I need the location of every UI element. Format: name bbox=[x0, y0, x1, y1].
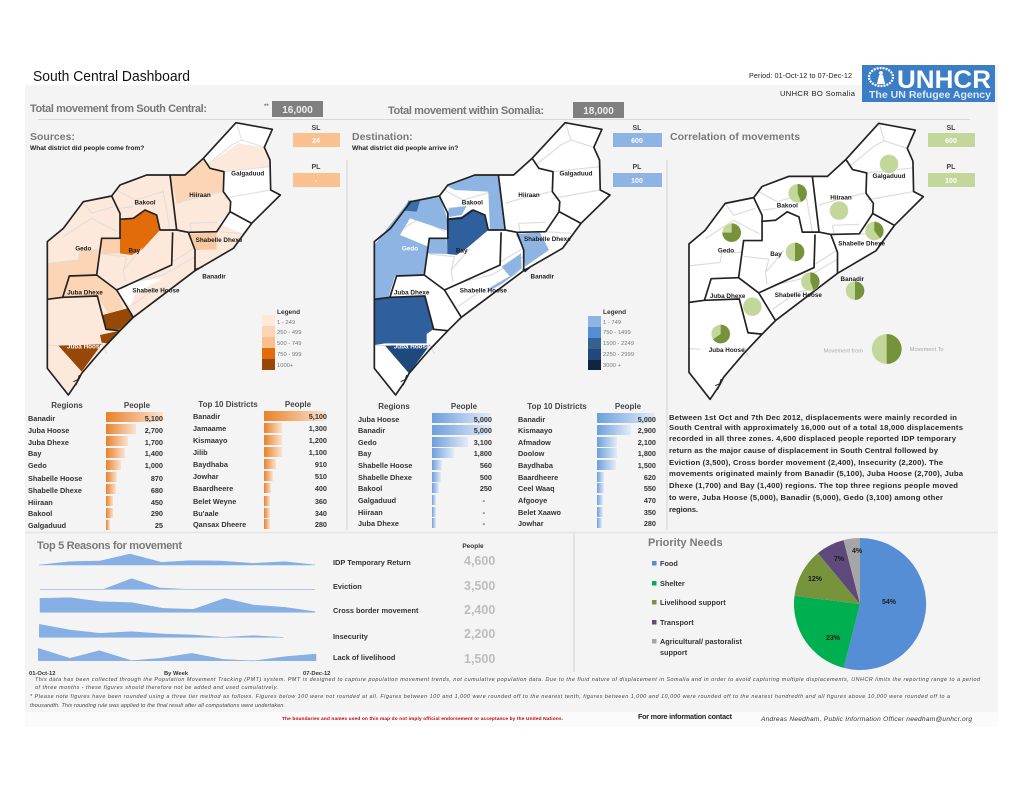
table: destination regions: - bbox=[483, 519, 486, 528]
table: source regions: 5,100 bbox=[145, 414, 163, 423]
narrative summary: regions. bbox=[669, 505, 698, 514]
table: destination regions bbox=[358, 402, 492, 528]
footnotes: thousandth. This rounding rule was applied to the final result after all computations were undertaken. bbox=[30, 703, 285, 709]
office name: UNHCR BO Somalia bbox=[780, 89, 856, 98]
map: sources choropleth: Juba Dhexe bbox=[67, 289, 103, 296]
table: source regions: 1,700 bbox=[145, 438, 163, 447]
table: source regions: Banadir bbox=[28, 414, 55, 423]
table: destination regions: 5,000 bbox=[474, 426, 492, 435]
narrative summary bbox=[669, 413, 964, 514]
table: source top 10 districts: 360 bbox=[315, 497, 327, 506]
stat boxes: destination SL and PL: 100 bbox=[631, 178, 643, 185]
total movement within Somalia: Total movement within Somalia: bbox=[388, 105, 544, 117]
table: destination top 10 districts: Top 10 Districts bbox=[527, 402, 587, 411]
icon: UNHCR logo: The UN Refugee Agency bbox=[869, 90, 991, 101]
legend: priority needs: Transport bbox=[660, 618, 694, 627]
map: correlation of movements with pies: Juba Dhexe bbox=[710, 293, 746, 300]
stat boxes: destination SL and PL: PL bbox=[633, 164, 642, 171]
table: source regions: Hiiraan bbox=[28, 498, 53, 507]
table: source regions: Juba Hoose bbox=[28, 426, 69, 435]
map: correlation of movements with pies: Juba Hoose bbox=[709, 347, 745, 354]
legend: priority needs: Agricultural/ pastoralist bbox=[660, 637, 742, 646]
pie chart: priority needs bbox=[794, 538, 926, 670]
legend: destination: Legend bbox=[603, 309, 626, 316]
table: destination regions: Juba Hoose bbox=[358, 415, 399, 424]
table: source regions: Galgaduud bbox=[28, 521, 66, 530]
footer strip bbox=[25, 712, 998, 727]
table: source regions: 1,000 bbox=[145, 461, 163, 470]
table: source regions: Regions bbox=[51, 401, 83, 410]
table: destination regions: Bay bbox=[358, 449, 372, 458]
map: destination choropleth: Galgaduud bbox=[559, 170, 593, 177]
map: sources choropleth: Shabelle Hoose bbox=[132, 288, 180, 295]
legend: sources: 750 - 999 bbox=[277, 352, 302, 358]
legend: sources bbox=[262, 309, 302, 370]
reasons list with values: Cross border movement bbox=[333, 606, 419, 615]
heading: top 5 reasons: Top 5 Reasons for movement bbox=[37, 540, 182, 552]
map: sources choropleth: Bakool bbox=[134, 200, 156, 207]
icon: UNHCR logo: UNHCR bbox=[897, 66, 991, 94]
chart axis labels bbox=[29, 671, 330, 677]
reasons list with values: 1,500 bbox=[464, 652, 495, 666]
reasons list with values: 2,200 bbox=[464, 627, 495, 641]
table: source regions: 680 bbox=[151, 486, 163, 495]
legend: destination: 1500 - 2249 bbox=[603, 341, 634, 347]
table: destination regions: - bbox=[483, 496, 486, 505]
map: correlation of movements with pies bbox=[689, 123, 944, 399]
heading: sources bbox=[30, 131, 144, 152]
table: destination top 10 districts: Baardheere bbox=[518, 473, 558, 482]
table: destination regions: Shabelle Hoose bbox=[358, 461, 412, 470]
stat boxes: correlation SL and PL: 100 bbox=[945, 178, 957, 185]
map: destination choropleth: Juba Hoose bbox=[394, 344, 430, 351]
table: source regions: Shabelle Hoose bbox=[28, 474, 82, 483]
pie chart: priority needs: 54% bbox=[882, 599, 897, 606]
map: sources choropleth bbox=[47, 123, 280, 395]
total movement from South Central: ** bbox=[264, 104, 269, 110]
legend: priority needs: Shelter bbox=[660, 579, 685, 588]
narrative summary: Eviction (3,500), Cross border movement (2,400), Insecurity (2,200). The bbox=[669, 458, 944, 467]
map: destination choropleth: Bay bbox=[456, 248, 468, 255]
table: source top 10 districts: Banadir bbox=[193, 412, 220, 421]
table: destination top 10 districts: Ceel Waaq bbox=[518, 484, 555, 493]
stat boxes: correlation SL and PL: SL bbox=[947, 125, 956, 132]
map: destination choropleth: Bakool bbox=[462, 200, 483, 207]
table: destination top 10 districts: Doolow bbox=[518, 449, 545, 458]
map: sources choropleth: Hiiraan bbox=[189, 192, 211, 199]
table: destination top 10 districts: 1,500 bbox=[638, 461, 656, 470]
map: correlation of movements with pies: Gedo bbox=[718, 248, 734, 255]
chart axis labels: 07-Dec-12 bbox=[303, 671, 330, 677]
legend: destination: 2250 - 2999 bbox=[603, 352, 634, 358]
stat boxes: destination SL and PL: SL bbox=[633, 125, 642, 132]
narrative summary: recorded in all three zones. 4,600 displaced people reported IDP temporary bbox=[669, 434, 957, 443]
table: destination top 10 districts: Belet Xaawo bbox=[518, 508, 562, 517]
table: source regions: 2,700 bbox=[145, 426, 163, 435]
map: correlation of movements with pies: Movement To bbox=[910, 347, 944, 353]
stat boxes: sources SL and PL: 24 bbox=[312, 138, 320, 145]
map: sources choropleth: Juba Hoose bbox=[67, 344, 103, 351]
table: source regions bbox=[28, 401, 163, 530]
table: destination regions: Banadir bbox=[358, 426, 385, 435]
stat boxes: sources SL and PL: - bbox=[315, 178, 318, 185]
legend: destination: 1 - 749 bbox=[603, 320, 621, 326]
table: source top 10 districts: Jamaame bbox=[193, 424, 226, 433]
table: destination top 10 districts: 470 bbox=[644, 496, 656, 505]
table: destination top 10 districts: 350 bbox=[644, 508, 656, 517]
table: destination regions: 500 bbox=[480, 473, 492, 482]
map: destination choropleth: Shabelle Hoose bbox=[460, 288, 507, 295]
pie chart: priority needs: 12% bbox=[808, 576, 823, 583]
map: correlation of movements with pies: Bay bbox=[770, 251, 782, 258]
icon: UNHCR logo bbox=[862, 65, 995, 102]
map: correlation of movements with pies: Shabelle Hoose bbox=[775, 292, 822, 299]
map: destination choropleth: Hiiraan bbox=[518, 192, 540, 199]
table: source regions: Bakool bbox=[28, 509, 52, 518]
table: destination regions: Bakool bbox=[358, 484, 382, 493]
table: destination top 10 districts: Baydhaba bbox=[518, 461, 554, 470]
map: destination choropleth: Shabelle Dhexe bbox=[524, 236, 571, 243]
stat boxes: sources SL and PL: SL bbox=[312, 125, 321, 132]
table: source regions: People bbox=[124, 401, 151, 410]
total movement from South Central bbox=[30, 101, 323, 117]
chart axis labels: By Week bbox=[164, 671, 189, 677]
table: destination top 10 districts: 550 bbox=[644, 484, 656, 493]
table: destination regions: Regions bbox=[378, 402, 410, 411]
table: destination top 10 districts bbox=[518, 402, 656, 528]
footnotes: * Please note figures have been rounded using a three tier method as follows. Figures below 100 were not rounded at all. Figures between 100 and 1,000 were rounded off to the nearest tenth, figures between 1,000 and 10,000 were rounded off to the nearest hundredth and all figures above 10,000 were rounded off to a bbox=[30, 694, 950, 700]
title bar bbox=[25, 65, 862, 85]
legend: priority needs bbox=[652, 559, 742, 657]
table: destination top 10 districts: Afmadow bbox=[518, 438, 551, 447]
legend: sources: 250 - 499 bbox=[277, 330, 302, 336]
narrative summary: return as the major cause of displacement in South Central followed by bbox=[669, 446, 939, 455]
map: correlation of movements with pies: Banadir bbox=[841, 276, 865, 283]
table: destination regions: Juba Dhexe bbox=[358, 519, 399, 528]
heading: sources: Sources: bbox=[30, 131, 75, 143]
legend: sources: 500 - 749 bbox=[277, 341, 302, 347]
table: source top 10 districts: 340 bbox=[315, 509, 327, 518]
map: correlation of movements with pies: Bakool bbox=[777, 202, 798, 209]
map: correlation of movements with pies: Movement from bbox=[824, 348, 863, 354]
reasons list with values bbox=[333, 543, 495, 666]
table: source top 10 districts: Jowhar bbox=[193, 472, 219, 481]
table: source regions: Gedo bbox=[28, 461, 47, 470]
heading: priority needs: Priority Needs bbox=[648, 537, 723, 549]
total movement within Somalia bbox=[388, 102, 624, 118]
table: source top 10 districts: Kismaayo bbox=[193, 436, 228, 445]
legend: sources: 1000+ bbox=[277, 363, 294, 369]
chart axis labels: 01-Oct-12 bbox=[29, 671, 55, 677]
reasons list with values: IDP Temporary Return bbox=[333, 558, 411, 567]
reasons list with values: People bbox=[462, 543, 484, 550]
legend: destination: 3000 + bbox=[603, 363, 622, 369]
stat boxes: sources SL and PL: PL bbox=[312, 164, 321, 171]
narrative summary: Between 1st Oct and 7th Dec 2012, displacements were mainly recorded in bbox=[669, 413, 957, 422]
heading: sources: What district did people come from? bbox=[30, 145, 144, 152]
table: source top 10 districts: Top 10 Districts bbox=[198, 400, 258, 409]
heading: destination: What district did people arrive in? bbox=[352, 145, 458, 152]
table: destination regions: 5,000 bbox=[474, 415, 492, 424]
table: source top 10 districts: Bu'aale bbox=[193, 509, 219, 518]
table: destination regions: 3,100 bbox=[474, 438, 492, 447]
table: source top 10 districts: Belet Weyne bbox=[193, 497, 236, 506]
legend: destination bbox=[588, 309, 634, 370]
map: destination choropleth: Gedo bbox=[402, 245, 418, 252]
legend: priority needs: Livelihood support bbox=[660, 598, 726, 607]
chart: weekly area sparklines bbox=[38, 554, 316, 661]
table: destination regions: 1,800 bbox=[474, 449, 492, 458]
reasons list with values: Insecurity bbox=[333, 632, 369, 641]
table: source regions: Shabelle Dhexe bbox=[28, 486, 82, 495]
legend: sources: 1 - 249 bbox=[277, 320, 295, 326]
pie chart: priority needs: 23% bbox=[826, 635, 841, 642]
table: source regions: 450 bbox=[151, 498, 163, 507]
table: destination top 10 districts: 280 bbox=[644, 519, 656, 528]
contact label: For more information contact bbox=[638, 712, 733, 721]
table: destination regions: Hiiraan bbox=[358, 508, 383, 517]
table: destination top 10 districts: 1,800 bbox=[638, 449, 656, 458]
map: destination choropleth: Banadir bbox=[531, 274, 555, 281]
total movement from South Central: 16,000 bbox=[282, 105, 313, 116]
table: destination top 10 districts: 5,000 bbox=[638, 415, 656, 424]
table: destination regions: Gedo bbox=[358, 438, 377, 447]
table: source regions: 25 bbox=[155, 521, 163, 530]
total movement within Somalia: 18,000 bbox=[583, 106, 614, 117]
legend: priority needs: support bbox=[660, 648, 688, 657]
reasons list with values: Eviction bbox=[333, 582, 362, 591]
table: destination regions: People bbox=[451, 402, 478, 411]
map: correlation of movements with pies: Hiiraan bbox=[830, 195, 852, 202]
table: source top 10 districts: 1,200 bbox=[309, 436, 327, 445]
table: source top 10 districts: 400 bbox=[315, 484, 327, 493]
reasons list with values: 4,600 bbox=[464, 554, 495, 568]
footnotes bbox=[30, 677, 981, 709]
table: source regions: 290 bbox=[151, 509, 163, 518]
stat boxes: destination SL and PL: 600 bbox=[631, 138, 643, 145]
dashboard background panel bbox=[25, 65, 998, 727]
heading: destination: Destination: bbox=[352, 131, 413, 143]
table: source top 10 districts: Baydhaba bbox=[193, 460, 229, 469]
narrative summary: South Central with approximately 16,000 out of a total 18,000 displacements bbox=[669, 423, 963, 432]
map: sources choropleth: Galgaduud bbox=[231, 170, 264, 177]
table: destination regions: Shabelle Dhexe bbox=[358, 473, 412, 482]
narrative summary: Dhexe (1,700) and Bay (1,400) regions. The top three regions people moved bbox=[669, 481, 958, 490]
legend: priority needs: Food bbox=[660, 559, 678, 568]
table: source top 10 districts: 5,100 bbox=[309, 412, 327, 421]
table: destination regions: 250 bbox=[480, 484, 492, 493]
table: destination regions: 560 bbox=[480, 461, 492, 470]
footnotes: of three months - these figures should therefore not be added and used cumulatively. bbox=[35, 685, 278, 691]
heading: destination bbox=[352, 131, 458, 152]
pie chart: priority needs: 4% bbox=[852, 548, 863, 555]
stat boxes: correlation SL and PL bbox=[928, 125, 975, 187]
footnotes: This data has been collected through the Population Movement Tracking (PMT) system. PMT is designed to capture population movement trends, not cumulative population data. Due to the fluid nature of displacement in Somalia and in order to avoid capturing multiple displacements, UNHCR limits the reporting range to a period bbox=[35, 677, 981, 683]
map: correlation of movements with pies: Shabelle Dhexe bbox=[838, 240, 886, 247]
dashboard title: South Central Dashboard bbox=[33, 68, 190, 85]
map: sources choropleth: Shabelle Dhexe bbox=[196, 237, 243, 244]
table: destination top 10 districts: 2,100 bbox=[638, 438, 656, 447]
table: destination top 10 districts: Jowhar bbox=[518, 519, 544, 528]
reasons list with values: 2,400 bbox=[464, 603, 495, 617]
table: destination top 10 districts: 620 bbox=[644, 473, 656, 482]
disclaimer: The boundaries and names used on this map do not imply official endorsement or acceptance by the United Nations. bbox=[282, 716, 563, 722]
table: source top 10 districts bbox=[193, 400, 327, 529]
table: destination top 10 districts: 2,900 bbox=[638, 426, 656, 435]
reasons list with values: 3,500 bbox=[464, 579, 495, 593]
table: source regions: Bay bbox=[28, 449, 42, 458]
stat boxes: correlation SL and PL: PL bbox=[947, 164, 956, 171]
table: destination regions: - bbox=[483, 508, 486, 517]
table: source top 10 districts: 1,300 bbox=[309, 424, 327, 433]
map: sources choropleth: Banadir bbox=[202, 274, 226, 281]
table: destination top 10 districts: Afgooye bbox=[518, 496, 547, 505]
table: source top 10 districts: 280 bbox=[315, 520, 327, 529]
table: destination top 10 districts: Kismaayo bbox=[518, 426, 553, 435]
table: source regions: 870 bbox=[151, 474, 163, 483]
heading: correlation of movements: Correlation of movements bbox=[670, 131, 800, 143]
table: destination regions: Galgaduud bbox=[358, 496, 396, 505]
legend: destination: 750 - 1499 bbox=[603, 330, 631, 336]
narrative summary: movements originated mainly from Banadir (5,100), Juba Hoose (2,700), Juba bbox=[669, 469, 964, 478]
table: source top 10 districts: 910 bbox=[315, 460, 327, 469]
map: sources choropleth: Gedo bbox=[75, 245, 92, 252]
table: source regions: 1,400 bbox=[145, 449, 163, 458]
table: source top 10 districts: 510 bbox=[315, 472, 327, 481]
contact details: Andreas Needham, Public Information Officer needham@unhcr.org bbox=[760, 716, 972, 723]
stat boxes: sources SL and PL bbox=[293, 125, 340, 187]
table: source top 10 districts: Baardheere bbox=[193, 484, 233, 493]
table: source top 10 districts: 1,100 bbox=[309, 448, 327, 457]
map: correlation of movements with pies: Galgaduud bbox=[872, 173, 906, 180]
legend: sources: Legend bbox=[277, 309, 300, 316]
table: destination top 10 districts: People bbox=[615, 402, 642, 411]
table: source top 10 districts: People bbox=[285, 400, 312, 409]
table: source top 10 districts: Jilib bbox=[193, 448, 208, 457]
total movement from South Central: Total movement from South Central: bbox=[30, 103, 207, 115]
narrative summary: to were, Juba Hoose (5,000), Banadir (5,000), Gedo (3,100) among other bbox=[669, 493, 943, 502]
pie chart: priority needs: 7% bbox=[834, 556, 845, 563]
reasons list with values: Lack of livelihood bbox=[333, 653, 396, 662]
map: destination choropleth: Juba Dhexe bbox=[394, 289, 430, 296]
stat boxes: destination SL and PL bbox=[613, 125, 662, 187]
reporting period: Period: 01-Oct-12 to 07-Dec-12 bbox=[749, 71, 852, 80]
table: source regions: Juba Dhexe bbox=[28, 438, 69, 447]
map: sources choropleth: Bay bbox=[129, 248, 141, 255]
map: destination choropleth bbox=[374, 123, 610, 395]
table: destination top 10 districts: Banadir bbox=[518, 415, 545, 424]
stat boxes: correlation SL and PL: 600 bbox=[945, 138, 957, 145]
table: source top 10 districts: Qansax Dheere bbox=[193, 520, 246, 529]
